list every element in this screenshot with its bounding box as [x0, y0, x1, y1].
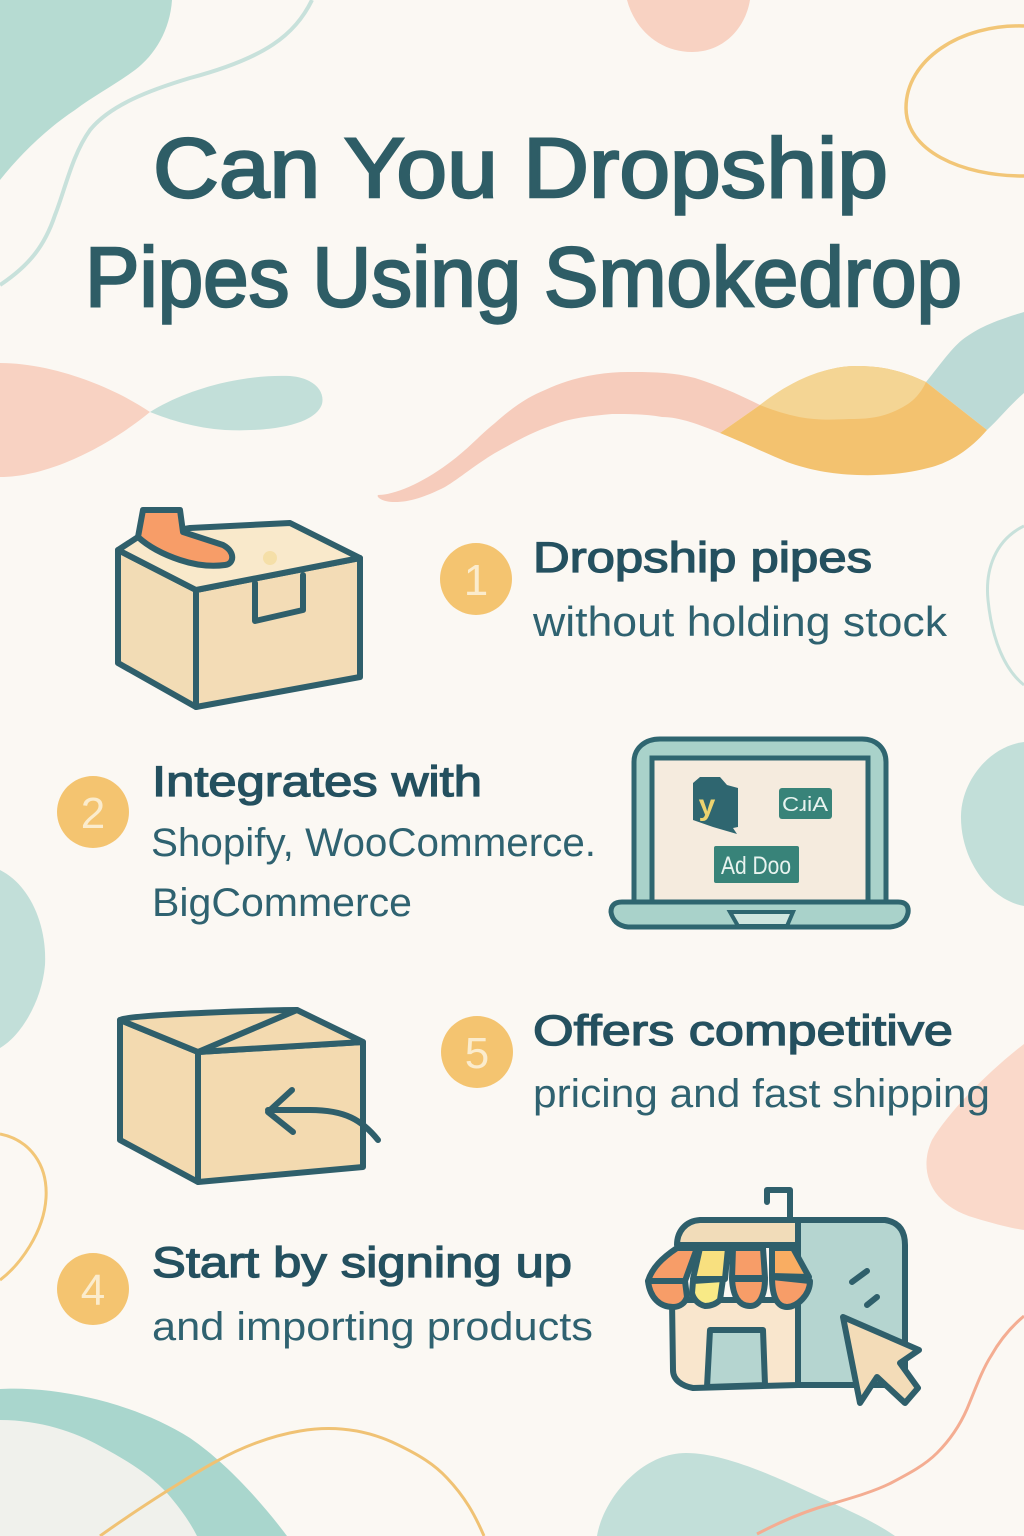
item 5 text: pricing and fast shipping: [533, 1072, 990, 1116]
item 2 text: Shopify, WooCommerce.: [151, 821, 596, 865]
logo badge Cbib: [779, 788, 832, 819]
icon: closed box with arrow: [120, 1010, 378, 1182]
item 2 text: [151, 758, 596, 925]
item 1 text: [532, 534, 948, 645]
item 2 text: BigCommerce: [152, 881, 412, 925]
title: [85, 121, 962, 324]
icon: open box with orange item: [118, 510, 360, 707]
title: Can You Dropship: [153, 121, 888, 215]
logo badge y: y: [699, 789, 716, 822]
badge 1: [440, 543, 512, 615]
icon: storefront with cursor: [648, 1190, 919, 1403]
item 4 text: Start by signing up: [152, 1239, 572, 1287]
title: Pipes Using Smokedrop: [85, 230, 962, 324]
item 5 text: [533, 1007, 990, 1116]
item 2: [57, 758, 596, 925]
logo badge Cbib: CɹiA: [782, 794, 829, 816]
badge 4: [57, 1253, 129, 1325]
item 2 text: Integrates with: [152, 758, 482, 806]
badge 2: 2: [81, 789, 105, 838]
badge 5: 5: [465, 1029, 489, 1078]
item 1: [440, 534, 948, 645]
logo badge y: [693, 777, 738, 834]
badge 5: [441, 1016, 513, 1088]
badge 1: 1: [464, 556, 488, 605]
icon: laptop with app logos: [611, 739, 908, 927]
item 4: [57, 1239, 593, 1349]
item 4 text: [152, 1239, 593, 1349]
badge 4: 4: [81, 1266, 105, 1315]
item 1 text: without holding stock: [532, 598, 948, 645]
item 5 text: Offers competitive: [533, 1007, 953, 1055]
logo badge Ad Doo: [714, 846, 799, 883]
badge 2: [57, 776, 129, 848]
item 1 text: Dropship pipes: [533, 534, 872, 582]
item 4 text: and importing products: [152, 1305, 593, 1349]
item 5: [441, 1007, 990, 1116]
logo badge Ad Doo: Ad Doo: [721, 852, 791, 880]
